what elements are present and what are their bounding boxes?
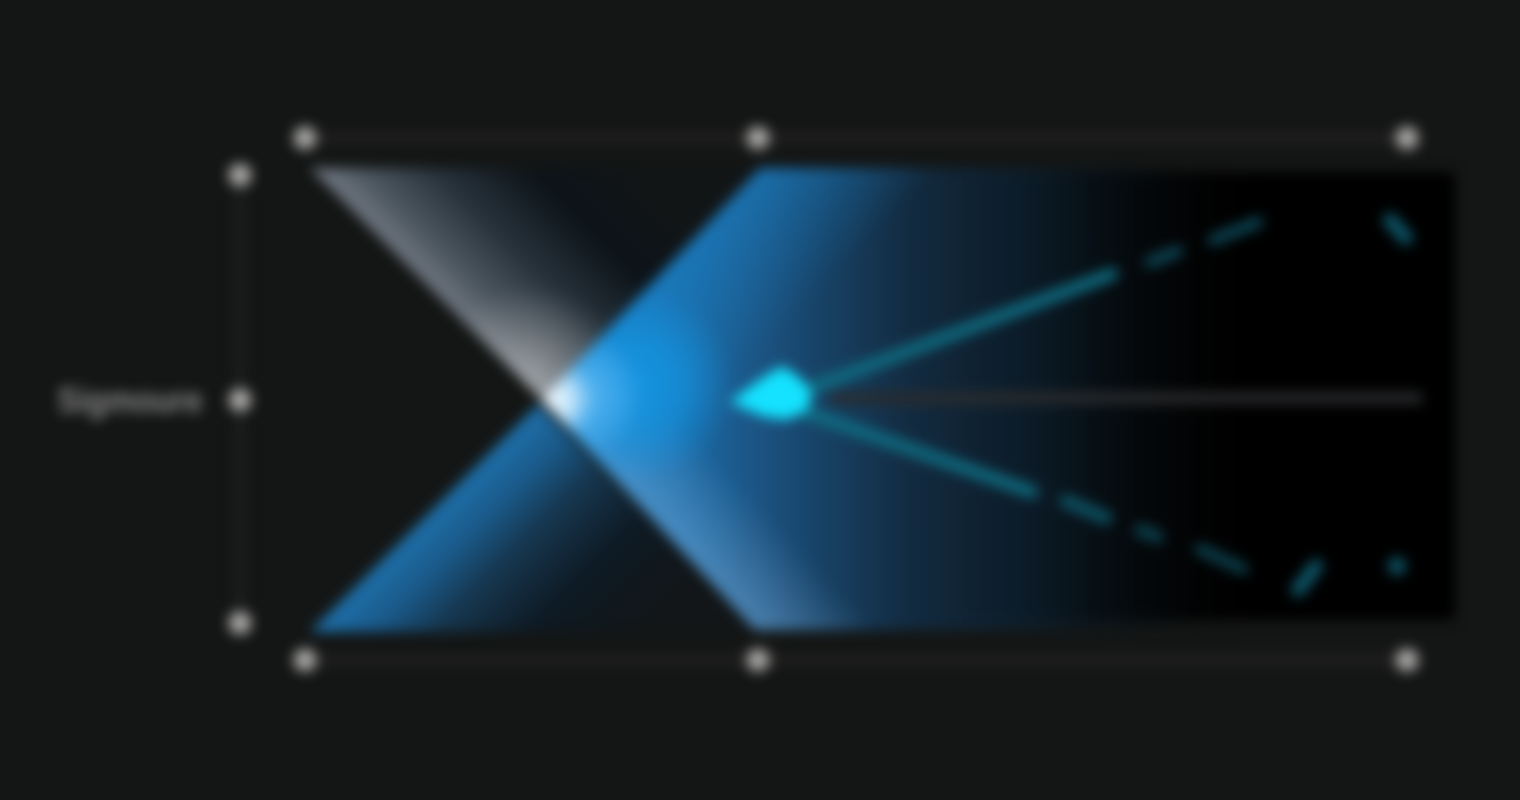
top dimension line (305, 134, 1407, 142)
left dimension line (236, 175, 244, 623)
upper-left grey light wedge (308, 159, 638, 406)
bottom dimension line (305, 656, 1407, 664)
dark panel on right (760, 172, 1455, 620)
main blue beam (534, 158, 1136, 640)
central axis line (830, 392, 1422, 404)
node markers (228, 126, 1418, 672)
lower ray with dashes (800, 410, 1406, 590)
lower-left blue light wedge (310, 404, 755, 632)
diagram: light beam through focal point (52, 118, 1457, 680)
cyan arrowhead (730, 366, 812, 420)
axis label: Sigmoure (58, 381, 202, 420)
upper ray with dashes (800, 220, 1406, 392)
